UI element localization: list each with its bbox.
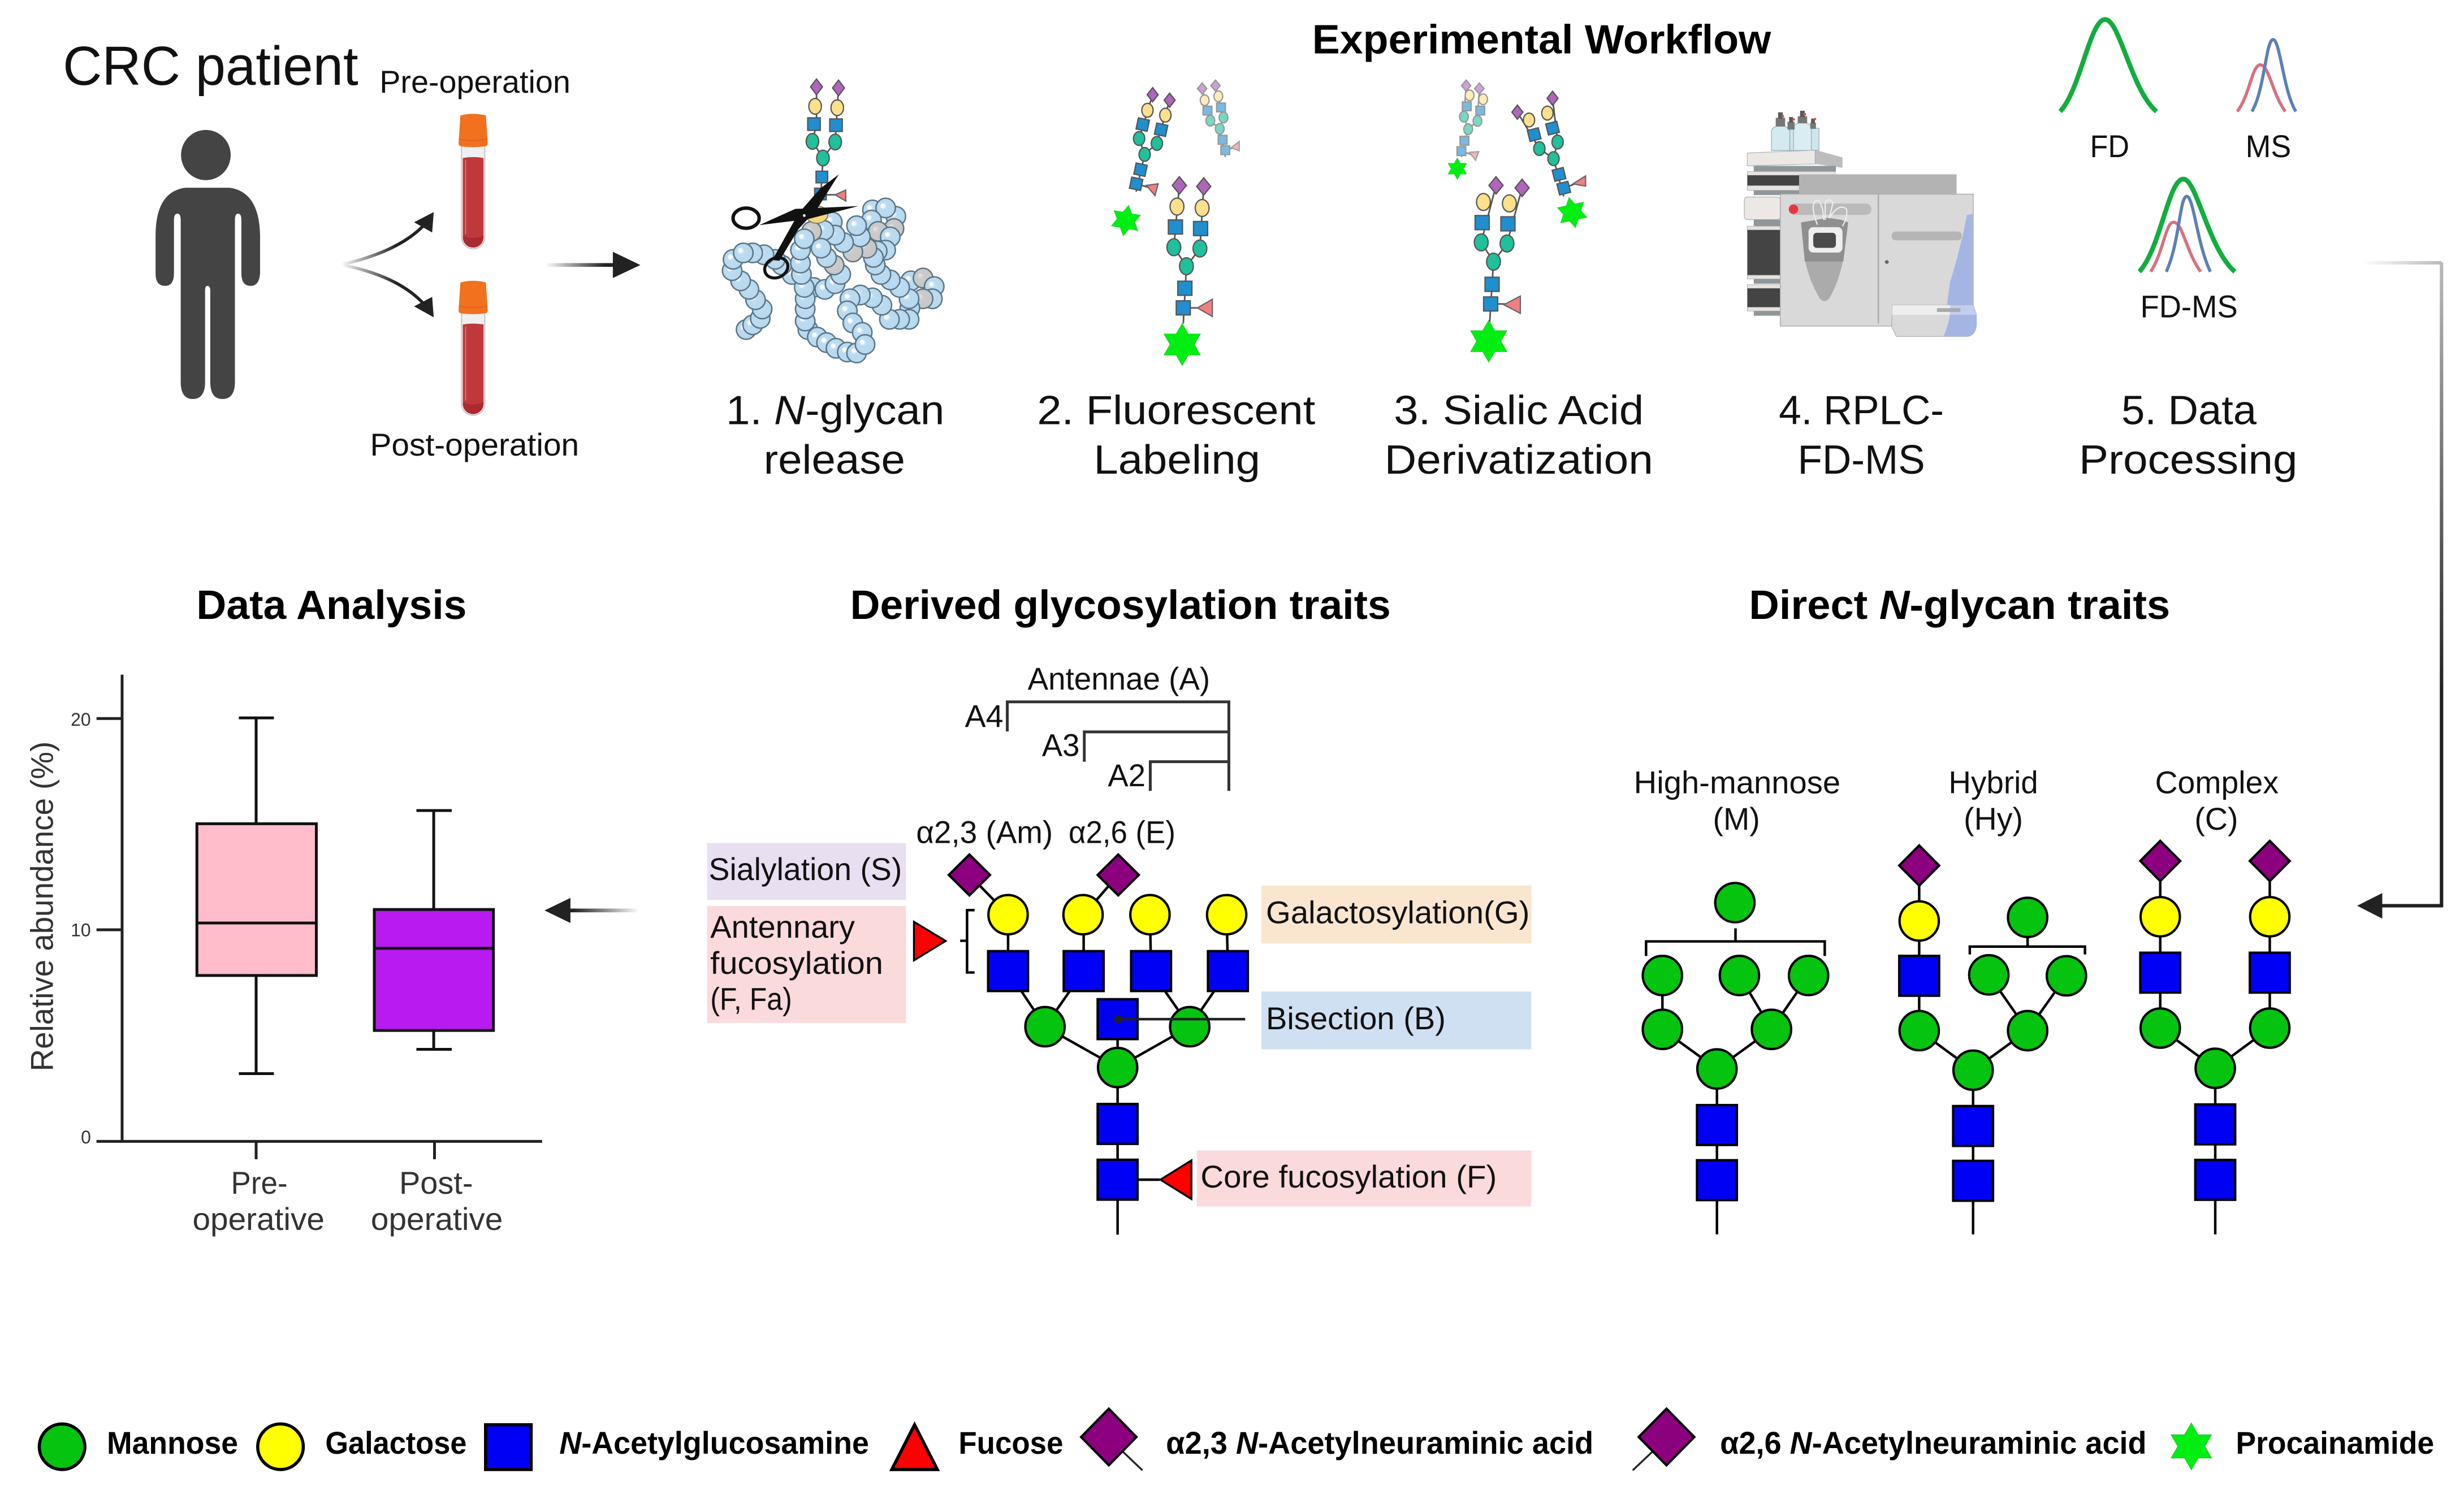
- label: Complex (C): [2155, 765, 2279, 837]
- label: FD-MS: FD-MS: [2140, 289, 2238, 324]
- step 1 label: 1. N-glycan: [726, 388, 944, 433]
- heading: Derived glycosylation traits: Derived glycosylation traits: [850, 583, 1391, 628]
- solvent bottles: [1771, 123, 1819, 150]
- label: FD: FD: [2090, 129, 2129, 164]
- pump stack: [1744, 150, 1843, 316]
- derived traits: antennae brackets: Antennae (A): [1028, 661, 1210, 696]
- legend: alpha 2,6 neuraminic acid: α2,6 N-Acetylneuraminic acid: [1720, 1425, 2147, 1461]
- legend: fucose: Fucose: [958, 1425, 1063, 1461]
- label: Hybrid (Hy): Hybrid: [1948, 765, 2038, 800]
- label: Hybrid (Hy): [1948, 765, 2038, 837]
- derived traits: antennae brackets: A4: [965, 699, 1004, 734]
- derived traits: antennae brackets: A2: [1108, 758, 1145, 793]
- step 5 label: 5. Data: [2121, 388, 2257, 433]
- panel details: [1789, 194, 1973, 324]
- bisection pointer: [1114, 1015, 1245, 1023]
- label: Post-operation: Post-operation: [370, 427, 579, 462]
- callout: Antennary fucosylation: (F, Fa): [710, 981, 792, 1016]
- heading: Data Analysis: Data Analysis: [196, 583, 466, 628]
- antennary fucose: [914, 922, 946, 960]
- front glycan: [1471, 177, 1529, 362]
- legend: N-acetylglucosamine: [486, 1425, 869, 1470]
- mannoses: [1026, 1007, 1209, 1087]
- legend: procainamide: Procainamide: [2236, 1425, 2434, 1461]
- derived traits: antennae brackets: [965, 661, 1229, 793]
- galactoses: [988, 895, 1246, 934]
- label: High-mannose (M): [1634, 765, 1840, 837]
- legend: [39, 1409, 2434, 1470]
- faded glycan: [1198, 80, 1239, 157]
- front glycan with fluorescent label: [1164, 177, 1212, 366]
- callout: Antennary fucosylation: fucosylation: [710, 946, 883, 981]
- callout: Bisection: Bisection (B): [1266, 1001, 1446, 1036]
- chart: MS peaks: [2237, 40, 2296, 111]
- step 2 label: 2. Fluorescent: [1037, 388, 1315, 433]
- box: post-operative: [374, 811, 494, 1049]
- autosampler tray: [1891, 305, 1977, 336]
- step 5 label second line: Processing: [2079, 437, 2297, 483]
- glycan being released: [806, 79, 846, 223]
- callout: Antennary fucosylation: Antennary: [710, 909, 855, 944]
- callout: Sialylation: [707, 843, 906, 900]
- icon: RPLC-FD-MS instrument: [1744, 111, 1977, 336]
- heading: CRC patient: CRC patient: [63, 35, 358, 97]
- step 3 label: 3. Sialic Acid: [1394, 388, 1644, 433]
- y axis tick labels: [71, 709, 91, 1147]
- front panel: [1780, 194, 1973, 326]
- derived traits: antennae brackets: A3: [1042, 728, 1079, 763]
- label: Complex (C): (C): [2194, 801, 2238, 837]
- legend: fucose: [892, 1425, 1063, 1470]
- legend: mannose: [39, 1424, 238, 1470]
- step 4 label second line: FD-MS: [1798, 437, 1925, 483]
- icon: patient silhouette: [155, 130, 260, 399]
- legend: N-acetylglucosamine: N-Acetylglucosamine: [559, 1425, 869, 1461]
- legend: alpha 2,6 neuraminic acid: [1633, 1409, 2147, 1470]
- callout: Galactosylation: [1261, 886, 1531, 943]
- linkages: [970, 875, 1228, 1234]
- antennary GlcNAc: [988, 951, 1248, 991]
- protein bead chain: [723, 198, 944, 363]
- label: alpha 2,6: α2,6 (E): [1069, 815, 1175, 850]
- icon: pre-operation blood tube: [459, 114, 488, 249]
- icon: post-operation blood tube: [459, 281, 488, 415]
- label: Hybrid (Hy): (Hy): [1964, 801, 2023, 837]
- arrow: traits to data analysis: [544, 898, 639, 923]
- label: High-mannose (M): (M): [1713, 801, 1760, 837]
- legend: procainamide: [2171, 1423, 2434, 1470]
- arrow: data processing to direct traits: [2357, 262, 2441, 918]
- icon: protein with released N-glycan: [723, 79, 944, 363]
- label: Complex (C): Complex: [2155, 765, 2279, 800]
- left glycan: [1110, 88, 1175, 239]
- y axis tick labels: 0: [81, 1127, 91, 1147]
- legend: alpha 2,3 neuraminic acid: α2,3 N-Acetylneuraminic acid: [1166, 1425, 1593, 1461]
- arrow: split to two blood samples: [341, 212, 434, 317]
- step 4 label: 4. RPLC-: [1779, 388, 1944, 433]
- y axis tick labels: 20: [71, 709, 91, 730]
- glycan: high-mannose: [1643, 883, 1828, 1234]
- callout: Bisection: [1261, 991, 1531, 1049]
- bisecting and core GlcNAc: [1097, 999, 1138, 1199]
- x axis labels: Post-: [399, 1165, 473, 1201]
- heading: Experimental Workflow: Experimental Workflow: [1312, 17, 1771, 62]
- antennary fucose bracket: [960, 910, 975, 973]
- box: pre-operative: [197, 718, 316, 1074]
- callout: Core fucosylation: Core fucosylation (F): [1200, 1159, 1497, 1194]
- glycan: complex: [2140, 841, 2290, 1234]
- chart: boxplot: [24, 675, 542, 1237]
- y axis tick labels: 10: [71, 920, 91, 940]
- bottle caps: [1776, 111, 1816, 129]
- x axis labels: operative: [192, 1202, 325, 1237]
- glycan: derived traits structure: [914, 855, 1248, 1234]
- label: MS: MS: [2246, 129, 2291, 164]
- legend: alpha 2,3 neuraminic acid: [1081, 1409, 1593, 1470]
- step 3 label second line: Derivatization: [1385, 437, 1653, 483]
- icon: sialic acid derivatization glycans: [1448, 80, 1589, 362]
- mass spectrometer body: [1799, 174, 1957, 194]
- label: alpha 2,3: α2,3 (Am): [916, 815, 1053, 850]
- arrow: to workflow: [545, 252, 641, 278]
- x axis labels: [192, 1165, 503, 1237]
- callout: Galactosylation: Galactosylation(G): [1266, 895, 1529, 930]
- label: Pre-operation: Pre-operation: [379, 64, 570, 99]
- legend: galactose: [258, 1424, 466, 1470]
- glycan: hybrid: [1899, 846, 2086, 1234]
- step 2 label second line: Labeling: [1093, 437, 1260, 483]
- legend: galactose: Galactose: [325, 1425, 466, 1461]
- sialic acids: [949, 855, 1139, 895]
- label: High-mannose (M): High-mannose: [1634, 765, 1840, 800]
- callout: Antennary fucosylation: [707, 906, 906, 1023]
- axes: [97, 675, 542, 1159]
- chart: FD peak: [2060, 19, 2156, 111]
- right glycan: [1512, 91, 1589, 231]
- icon: scissors: [733, 174, 858, 281]
- callout: Sialylation: Sialylation (S): [708, 852, 902, 887]
- x axis labels: Pre-: [231, 1165, 288, 1201]
- chart: FD-MS overlaid peaks: [2139, 179, 2235, 272]
- x axis labels: operative: [371, 1202, 503, 1237]
- heading: Direct N-glycan traits: Direct N-glycan traits: [1749, 583, 2170, 628]
- faded glycan fluorescent star: [1448, 158, 1467, 180]
- core fucose: [1160, 1160, 1191, 1199]
- step 1 label second line: release: [764, 437, 905, 483]
- legend: mannose: Mannose: [107, 1425, 238, 1461]
- icon: fluorescent labeling glycans: [1110, 80, 1239, 366]
- callout: Core fucosylation: [1197, 1150, 1531, 1206]
- faded glycan: [1457, 80, 1488, 160]
- y axis title: Relative abundance (%): [24, 742, 59, 1071]
